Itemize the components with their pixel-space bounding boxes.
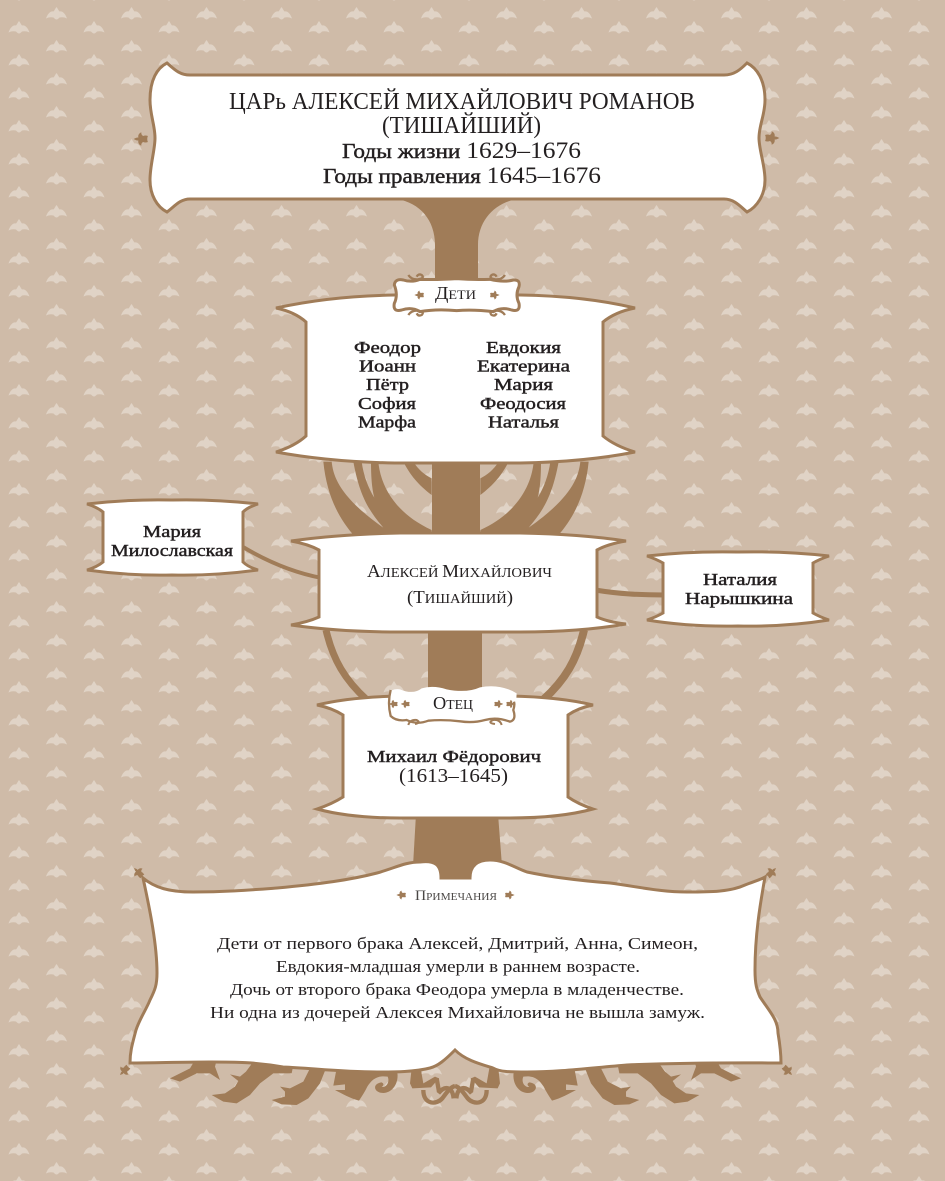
notes text xyxy=(210,934,705,1022)
title line 2: (ТИШАЙШИЙ) xyxy=(382,113,541,139)
father name: Михаил Фёдорович xyxy=(367,747,542,766)
icon: fleuron xyxy=(490,291,500,299)
banner: title xyxy=(134,63,779,212)
notes text: Дети от первого брака Алексей, Дмитрий, Анна, Симеон, xyxy=(217,934,698,953)
heading text: ДЕТИ xyxy=(435,283,476,303)
father years: (1613–1645) xyxy=(399,765,508,787)
plaque border xyxy=(389,690,514,723)
notes text: Дочь от второго брака Феодора умерла в младенчестве. xyxy=(230,980,684,999)
children right column: Евдокия xyxy=(486,338,561,357)
notes heading: ПРИМЕЧАНИЯ xyxy=(415,888,498,904)
icon: corner fleuron top right xyxy=(764,864,780,880)
reign years: Годы правления 1645–1676 xyxy=(323,163,601,188)
icon: corner fleuron bottom left xyxy=(116,1063,132,1079)
plaque: children heading xyxy=(394,274,519,316)
title line 1: ЦАРь АЛЕКСЕЙ МИХАЙЛОВИЧ РОМАНОВ xyxy=(229,89,695,115)
icon: fleuron xyxy=(401,700,410,708)
children left column: Иоанн xyxy=(359,356,416,376)
heading text: ОТЕЦ xyxy=(433,693,473,713)
icon: fleuron xyxy=(494,700,503,708)
children left column: Феодор xyxy=(354,338,421,357)
children right column xyxy=(477,338,571,432)
scroll flourishes xyxy=(408,720,502,725)
icon: fleuron xyxy=(506,700,515,708)
children right column: Наталья xyxy=(488,412,559,432)
children right column: Мария xyxy=(494,375,553,394)
icon: fleuron xyxy=(414,291,424,299)
tree roots xyxy=(170,1060,741,1105)
plaque: father heading xyxy=(388,686,517,725)
children left column: София xyxy=(358,394,416,413)
roots right xyxy=(513,1060,741,1105)
children left column: Пётр xyxy=(366,375,409,394)
panel: children xyxy=(276,274,635,463)
second wife name: Нарышкина xyxy=(685,589,794,608)
scroll flourishes xyxy=(408,274,505,316)
base trunk xyxy=(413,814,502,882)
children left column xyxy=(354,338,421,432)
branches to children right xyxy=(480,462,589,538)
notes text: Евдокия-младшая умерли в раннем возрасте. xyxy=(276,957,640,976)
panel: notes xyxy=(116,860,796,1079)
branches to children left xyxy=(323,462,432,538)
upper trunk xyxy=(397,199,517,290)
first wife name: Мария xyxy=(143,522,201,541)
icon: corner fleuron bottom right xyxy=(780,1063,796,1079)
children right column: Екатерина xyxy=(477,356,571,376)
icon: fleuron xyxy=(389,700,398,708)
middle trunk xyxy=(432,458,480,540)
panel: first wife xyxy=(87,500,258,575)
panel: Aleksei xyxy=(291,533,626,632)
first wife name: Милославская xyxy=(111,541,233,560)
icon: fleuron right xyxy=(765,131,779,145)
Aleksei name: АЛЕКСЕЙ МИХАЙЛОВИЧ xyxy=(367,561,552,581)
second wife name xyxy=(685,570,794,608)
second wife name: Наталия xyxy=(703,570,777,589)
icon: corner fleuron top left xyxy=(130,864,146,880)
children left column: Марфа xyxy=(358,412,417,432)
roots left xyxy=(170,1060,398,1105)
lower branches and marriage connectors xyxy=(243,547,665,700)
children right column: Феодосия xyxy=(480,394,566,413)
panel: second wife xyxy=(647,552,829,626)
Aleksei epithet: (ТИШАЙШИЙ ) xyxy=(407,587,513,607)
notes text: Ни одна из дочерей Алексея Михайловича не вышла замуж. xyxy=(210,1003,705,1022)
first wife name xyxy=(111,522,233,560)
life years: Годы жизни 1629–1676 xyxy=(342,138,581,163)
root knot ornament xyxy=(410,1068,500,1103)
icon: fleuron left of heading xyxy=(396,891,406,899)
icon: fleuron left xyxy=(134,132,148,146)
panel: father xyxy=(317,686,593,818)
tree trunk and branches xyxy=(243,199,665,882)
lower trunk xyxy=(428,628,482,702)
icon: fleuron right of heading xyxy=(505,891,515,899)
